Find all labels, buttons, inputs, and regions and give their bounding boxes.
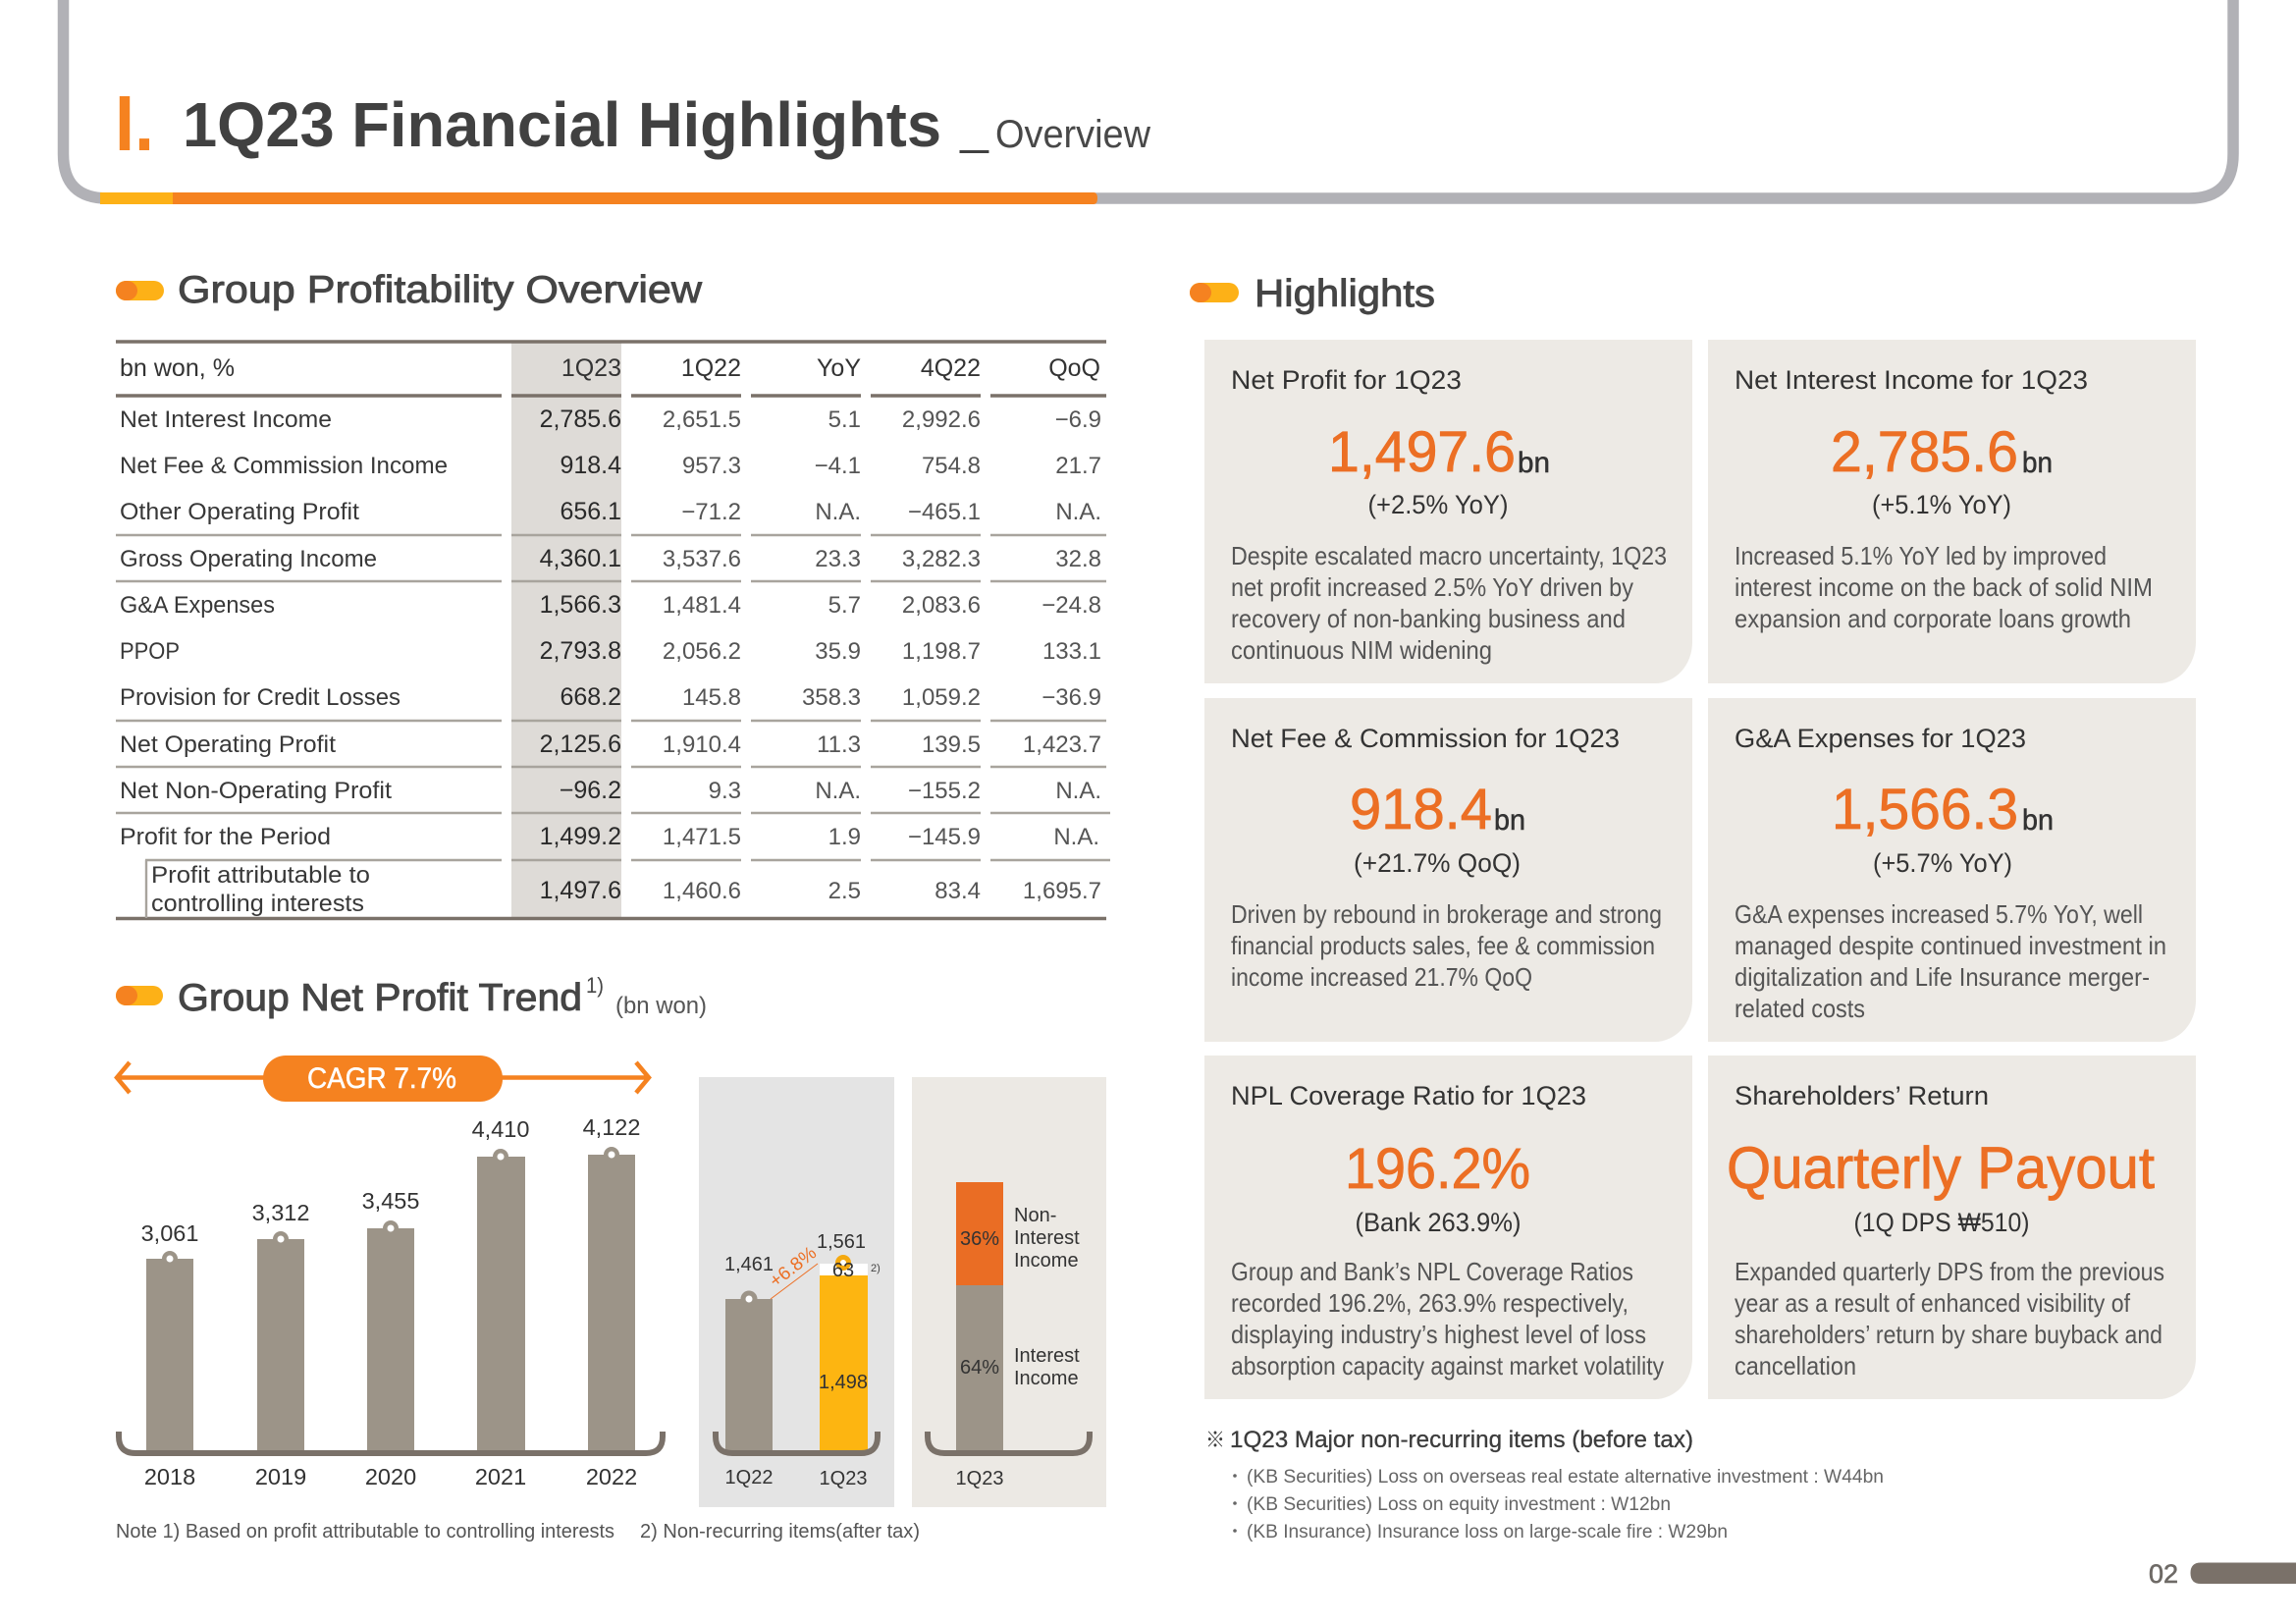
bar 2020: 3,455 — [362, 1188, 419, 1214]
panel: Shareholders' Return: Expanded quarterly DPS from the previous — [1735, 1257, 2164, 1286]
row: Net Fee and Commission Income: 754.8 — [922, 453, 981, 479]
row: Net Non-Operating Profit: 9.3 — [709, 778, 741, 804]
row: Other Operating Profit: −465.1 — [908, 499, 981, 525]
panel: Net Interest Income: bn — [2022, 447, 2053, 479]
panel: NPL Coverage Ratio: recorded 196.2%, 263.9% respectively, — [1231, 1288, 1629, 1318]
profitability table — [116, 341, 1110, 919]
row: Profit attributable to controlling interests — [151, 862, 1101, 917]
panel: G&A Expenses: G&A expenses increased 5.7% YoY, well — [1735, 899, 2143, 929]
panel: NPL Coverage Ratio: NPL Coverage Ratio for 1Q23 — [1231, 1081, 1586, 1110]
panel: G&A Expenses: managed despite continued investment in — [1735, 931, 2166, 960]
row: Net Interest Income: 2,651.5 — [663, 406, 741, 433]
title: I. — [115, 80, 154, 167]
panel: Shareholders' Return: Quarterly Payout — [1727, 1135, 2155, 1201]
row: Profit attributable to controlling interests: controlling interests — [151, 891, 364, 917]
row: Other Operating Profit: N.A. — [1055, 499, 1101, 525]
row: Other Operating Profit: 656.1 — [560, 498, 621, 525]
row: Profit attributable to controlling interests: 83.4 — [934, 878, 981, 904]
row: PPOP: PPOP — [120, 638, 180, 665]
chart base — [716, 1432, 878, 1453]
row: Net Interest Income: 2,992.6 — [902, 406, 981, 433]
heading: Highlights — [1190, 273, 1435, 315]
panel: G&A Expenses: related costs — [1735, 994, 1865, 1023]
panel: G&A Expenses — [1708, 698, 2196, 1042]
row: Net Fee and Commission Income: 918.4 — [560, 452, 621, 479]
row: PPOP — [120, 637, 1101, 665]
text block: non-recurring items: (KB Securities) Loss on equity investment : W12bn — [1247, 1494, 1671, 1515]
row: Gross Operating Income: 23.3 — [815, 546, 861, 572]
panel: Shareholders' Return: (1Q DPS ₩510) — [1853, 1208, 2030, 1237]
row: PPOP: 2,793.8 — [540, 637, 621, 665]
bar 2018: 3,061 — [141, 1220, 198, 1246]
heading: Group Profitability Overview: Group Profitability Overview — [178, 269, 703, 311]
row: Gross Operating Income: 4,360.1 — [540, 545, 621, 572]
row: G&A Expenses: −24.8 — [1041, 592, 1101, 619]
panel: income mix — [912, 1077, 1106, 1507]
bar 2022 — [583, 1114, 640, 1489]
row: Net Fee and Commission Income: Net Fee & Commission Income — [120, 453, 448, 479]
panel: Net Fee and Commission: financial products sales, fee & commission — [1231, 931, 1655, 960]
row: Provision for Credit Losses: 1,059.2 — [902, 684, 981, 711]
row: Net Fee and Commission Income: −4.1 — [815, 453, 861, 479]
header row: bn won, % — [120, 354, 235, 382]
stacked bar: 64% — [960, 1357, 999, 1379]
heading: Group Net Profit Trend: (bn won) — [615, 993, 707, 1019]
CAGR arrow: CAGR 7.7% — [307, 1062, 456, 1095]
row: Profit for the Period: N.A. — [1053, 824, 1099, 850]
panel: NPL Coverage Ratio: displaying industry’s highest level of loss — [1231, 1320, 1646, 1349]
highlighted 1Q23 column — [511, 341, 621, 919]
heading: Group Net Profit Trend: 1) — [586, 973, 604, 998]
row: Net Operating Profit: 11.3 — [817, 731, 861, 758]
row: PPOP: 35.9 — [815, 638, 861, 665]
bar 1Q23: 1,561 — [817, 1231, 866, 1253]
bar 2019: 3,312 — [252, 1200, 309, 1225]
legend: interest income — [1014, 1345, 1080, 1389]
legend: non-interest income: Interest — [1014, 1227, 1080, 1249]
row: Gross Operating Income: 3,282.3 — [902, 546, 981, 572]
row: Provision for Credit Losses: −36.9 — [1041, 684, 1101, 711]
bar 2022: 2022 — [586, 1464, 637, 1489]
table rules — [116, 342, 1110, 919]
panel: Net Fee and Commission: 918.4 — [1350, 778, 1492, 841]
stacked bar: 36% — [960, 1228, 999, 1250]
page number — [2149, 1559, 2296, 1589]
row: Other Operating Profit — [120, 498, 1101, 525]
bar 2019 — [252, 1200, 309, 1489]
bar 1Q23: 2) — [871, 1263, 881, 1274]
row: Net Non-Operating Profit — [120, 777, 1101, 804]
panel: G&A Expenses: 1,566.3 — [1832, 778, 2018, 841]
chart base — [928, 1432, 1090, 1453]
bar 1Q22: 1,461 — [724, 1254, 774, 1275]
panel: Net Profit — [1204, 340, 1692, 683]
row: Net Operating Profit: Net Operating Profit — [120, 731, 336, 758]
row: Profit for the Period: 1,499.2 — [540, 823, 621, 850]
row: Profit attributable to controlling interests: 1,497.6 — [540, 877, 621, 904]
row: Net Interest Income: −6.9 — [1055, 406, 1101, 433]
panel: Net Interest Income: 2,785.6 — [1831, 420, 2018, 484]
row: Net Fee and Commission Income — [120, 452, 1101, 479]
bar 1Q22: 1Q22 — [725, 1467, 773, 1489]
row: Profit attributable to controlling interests: 1,460.6 — [663, 878, 741, 904]
chart base — [119, 1432, 663, 1453]
row: G&A Expenses: 5.7 — [828, 592, 861, 619]
row: PPOP: 1,198.7 — [902, 638, 981, 665]
row: Net Operating Profit — [120, 731, 1101, 758]
bar 2018 — [141, 1220, 198, 1489]
bar chart: annual net profit — [119, 1114, 663, 1489]
panel: Net Profit: Despite escalated macro uncertainty, 1Q23 — [1231, 541, 1667, 570]
row: Net Fee and Commission Income: 957.3 — [682, 453, 741, 479]
bar 1Q22 — [724, 1254, 774, 1489]
panel: NPL Coverage Ratio: (Bank 263.9%) — [1355, 1208, 1522, 1237]
panel: G&A Expenses: (+5.7% YoY) — [1873, 848, 2012, 878]
legend: non-interest income — [1014, 1205, 1080, 1272]
panel: Net Fee and Commission: (+21.7% QoQ) — [1354, 848, 1521, 878]
bar 1Q23: 63 — [832, 1260, 854, 1281]
page number: 02 — [2149, 1559, 2178, 1589]
bar 1Q23: 1Q23 — [820, 1468, 867, 1489]
row: Profit for the Period: Profit for the Period — [120, 824, 331, 850]
footnote: Note 1) Based on profit attributable to controlling interests — [116, 1521, 614, 1543]
row: G&A Expenses — [120, 591, 1101, 619]
header row — [120, 354, 1100, 382]
footnote — [116, 1521, 920, 1543]
row: Net Operating Profit: 1,910.4 — [663, 731, 741, 758]
text block: non-recurring items: (KB Securities) Loss on overseas real estate alternative investment : W44bn — [1247, 1467, 1884, 1488]
row: Net Interest Income: 5.1 — [828, 406, 861, 433]
row: Other Operating Profit: N.A. — [815, 499, 861, 525]
row: G&A Expenses: 1,481.4 — [663, 592, 741, 619]
text block: non-recurring items — [1205, 1427, 1884, 1543]
row: Net Operating Profit: 1,423.7 — [1023, 731, 1101, 758]
panel: quarterly net profit comparison — [699, 1077, 894, 1507]
row: Net Non-Operating Profit: −96.2 — [560, 777, 621, 804]
footnote: 2) Non-recurring items(after tax) — [640, 1521, 920, 1543]
row: Provision for Credit Losses: Provision for Credit Losses — [120, 684, 400, 711]
row: Profit attributable to controlling interests: 1,695.7 — [1023, 878, 1101, 904]
panel: NPL Coverage Ratio: absorption capacity against market volatility — [1231, 1351, 1664, 1380]
panel: Shareholders' Return — [1708, 1056, 2196, 1399]
row: Net Non-Operating Profit: −155.2 — [908, 778, 981, 804]
row: Provision for Credit Losses: 145.8 — [682, 684, 741, 711]
row: Profit for the Period: −145.9 — [908, 824, 981, 850]
text block: non-recurring items: (KB Insurance) Insurance loss on large-scale fire : W29bn — [1247, 1522, 1728, 1543]
row: Net Operating Profit: 139.5 — [922, 731, 981, 758]
header row: 1Q23 — [561, 354, 621, 382]
row: Gross Operating Income: 3,537.6 — [663, 546, 741, 572]
stacked bar — [956, 1182, 1003, 1451]
panel: NPL Coverage Ratio — [1204, 1056, 1692, 1399]
bar 2021 — [472, 1116, 529, 1489]
row: Gross Operating Income: 32.8 — [1055, 546, 1101, 572]
legend: non-interest income: Income — [1014, 1250, 1079, 1272]
header row: YoY — [817, 354, 861, 382]
row: Gross Operating Income: Gross Operating Income — [120, 546, 377, 572]
CAGR arrow — [117, 1056, 649, 1102]
bar 2020: 2020 — [365, 1464, 416, 1489]
text block: non-recurring items: 1Q23 Major non-recurring items (before tax) — [1230, 1427, 1693, 1453]
panel: Shareholders' Return: year as a result of enhanced visibility of — [1735, 1288, 2131, 1318]
row: Profit attributable to controlling interests: Profit attributable to — [151, 862, 370, 889]
row: Gross Operating Income — [120, 545, 1101, 572]
growth callout: +6.8% — [766, 1243, 821, 1292]
row: Profit for the Period: 1.9 — [828, 824, 861, 850]
bar 2018: 2018 — [144, 1464, 195, 1489]
panel: Net Interest Income: expansion and corporate loans growth — [1735, 604, 2131, 633]
panel: Net Profit: net profit increased 2.5% YoY driven by — [1231, 572, 1633, 602]
row: G&A Expenses: 1,566.3 — [540, 591, 621, 619]
legend: interest income: Interest — [1014, 1345, 1080, 1367]
panel: Net Interest Income: Net Interest Income for 1Q23 — [1735, 365, 2088, 395]
panel: Shareholders' Return: cancellation — [1735, 1351, 1856, 1380]
row: Provision for Credit Losses: 358.3 — [802, 684, 861, 711]
row: Provision for Credit Losses — [120, 683, 1101, 711]
panel: G&A Expenses: bn — [2022, 804, 2054, 837]
panel: Net Profit: continuous NIM widening — [1231, 635, 1492, 665]
heading: Group Net Profit Trend — [116, 973, 707, 1019]
panel: NPL Coverage Ratio: Group and Bank’s NPL Coverage Ratios — [1231, 1257, 1633, 1286]
row: Profit for the Period — [120, 823, 1099, 850]
panel: G&A Expenses: digitalization and Life Insurance merger- — [1735, 962, 2150, 992]
panel: Shareholders' Return: Shareholders’ Return — [1735, 1081, 1989, 1110]
row: Net Interest Income: Net Interest Income — [120, 406, 332, 433]
row: Profit for the Period: 1,471.5 — [663, 824, 741, 850]
legend: interest income: Income — [1014, 1368, 1079, 1389]
text block: non-recurring items: ※ — [1205, 1428, 1225, 1452]
panel: Net Fee and Commission: bn — [1494, 804, 1525, 837]
row: Provision for Credit Losses: 668.2 — [560, 683, 621, 711]
row: Net Interest Income — [120, 406, 1101, 433]
row: Net Fee and Commission Income: 21.7 — [1055, 453, 1101, 479]
title: Overview — [995, 113, 1150, 156]
header frame — [63, 0, 2233, 204]
bar 2022: 4,122 — [583, 1114, 640, 1140]
panel: Net Profit: bn — [1518, 447, 1550, 479]
bar 1Q23: 1,498 — [819, 1372, 868, 1393]
panel: income mix: 1Q23 — [956, 1468, 1003, 1489]
row: Net Interest Income: 2,785.6 — [540, 406, 621, 433]
heading: Highlights: Highlights — [1255, 273, 1435, 315]
panel: Net Interest Income — [1708, 340, 2196, 683]
bar 2019: 2019 — [255, 1464, 306, 1489]
bar 2021: 2021 — [475, 1464, 526, 1489]
heading: Group Net Profit Trend: Group Net Profit Trend — [178, 977, 582, 1019]
title: 1Q23 Financial Highlights — [183, 89, 941, 160]
panel: Net Interest Income: Increased 5.1% YoY led by improved — [1735, 541, 2107, 570]
title — [115, 73, 1150, 167]
row: G&A Expenses: 2,083.6 — [902, 592, 981, 619]
row: Net Operating Profit: 2,125.6 — [540, 731, 621, 758]
bar 2021: 4,410 — [472, 1116, 529, 1142]
panel: NPL Coverage Ratio: 196.2% — [1345, 1137, 1530, 1201]
panel: G&A Expenses: G&A Expenses for 1Q23 — [1735, 724, 2026, 753]
row: Net Non-Operating Profit: N.A. — [1055, 778, 1101, 804]
panel: Net Fee and Commission: Driven by rebound in brokerage and strong — [1231, 899, 1662, 929]
header row: 4Q22 — [921, 354, 981, 382]
row: Net Non-Operating Profit: N.A. — [815, 778, 861, 804]
panel: Net Profit: (+2.5% YoY) — [1368, 490, 1508, 519]
title: _ — [959, 73, 989, 160]
bar 1Q23 — [817, 1231, 881, 1489]
row: PPOP: 133.1 — [1042, 638, 1101, 665]
panel: Net Fee and Commission: Net Fee & Commission for 1Q23 — [1231, 724, 1620, 753]
row: Profit attributable to controlling interests: 2.5 — [828, 878, 861, 904]
row: Other Operating Profit: −71.2 — [681, 499, 741, 525]
panel: Net Profit: recovery of non-banking business and — [1231, 604, 1626, 633]
row: Other Operating Profit: Other Operating Profit — [120, 499, 359, 525]
panel: Net Fee and Commission: income increased 21.7% QoQ — [1231, 962, 1532, 992]
row: Net Non-Operating Profit: Net Non-Operating Profit — [120, 778, 392, 804]
legend: non-interest income: Non- — [1014, 1205, 1056, 1226]
panel: Net Interest Income: interest income on the back of solid NIM — [1735, 572, 2153, 602]
bar 2020 — [362, 1188, 419, 1489]
row: G&A Expenses: G&A Expenses — [120, 592, 275, 619]
header row: QoQ — [1048, 354, 1100, 382]
panel: Net Interest Income: (+5.1% YoY) — [1872, 490, 2011, 519]
row: PPOP: 2,056.2 — [663, 638, 741, 665]
header row: 1Q22 — [681, 354, 741, 382]
panel: Net Fee and Commission — [1204, 698, 1692, 1042]
panel: Net Profit: Net Profit for 1Q23 — [1231, 365, 1462, 395]
panel: Net Profit: 1,497.6 — [1328, 420, 1516, 484]
panel: Shareholders' Return: shareholders’ return by share buyback and — [1735, 1320, 2163, 1349]
